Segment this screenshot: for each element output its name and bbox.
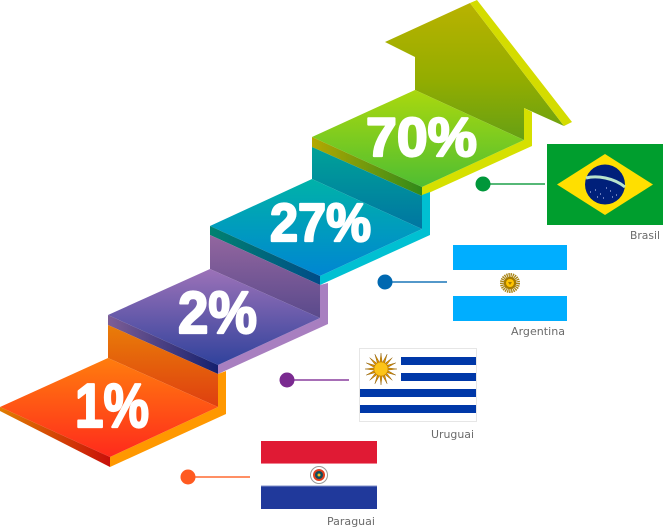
step: Brasil 70% [312,90,532,196]
percentage: 70%: 70% [366,106,477,168]
arrow head and top riser [385,0,572,140]
label: Brasil: Brasil [630,229,660,242]
flag: Brasil [547,144,663,225]
step: Uruguai 2% [108,235,328,374]
step: Paraguai 1% [0,325,226,467]
connector: Paraguai [180,470,250,484]
label: Argentina: Argentina [511,325,565,338]
percentage: 2%: 2% [178,280,257,346]
flag: Argentina [453,245,567,321]
connector: Uruguai [280,372,349,388]
flag: Paraguai [261,441,377,509]
step: Argentina 27% [210,147,430,285]
label: Uruguai: Uruguai [431,428,474,441]
flag: Uruguai [360,348,476,422]
connector: Argentina [378,274,447,290]
percentage: 27%: 27% [270,193,371,253]
connector: Brasil [476,176,545,192]
percentage: 1%: 1% [75,372,149,441]
